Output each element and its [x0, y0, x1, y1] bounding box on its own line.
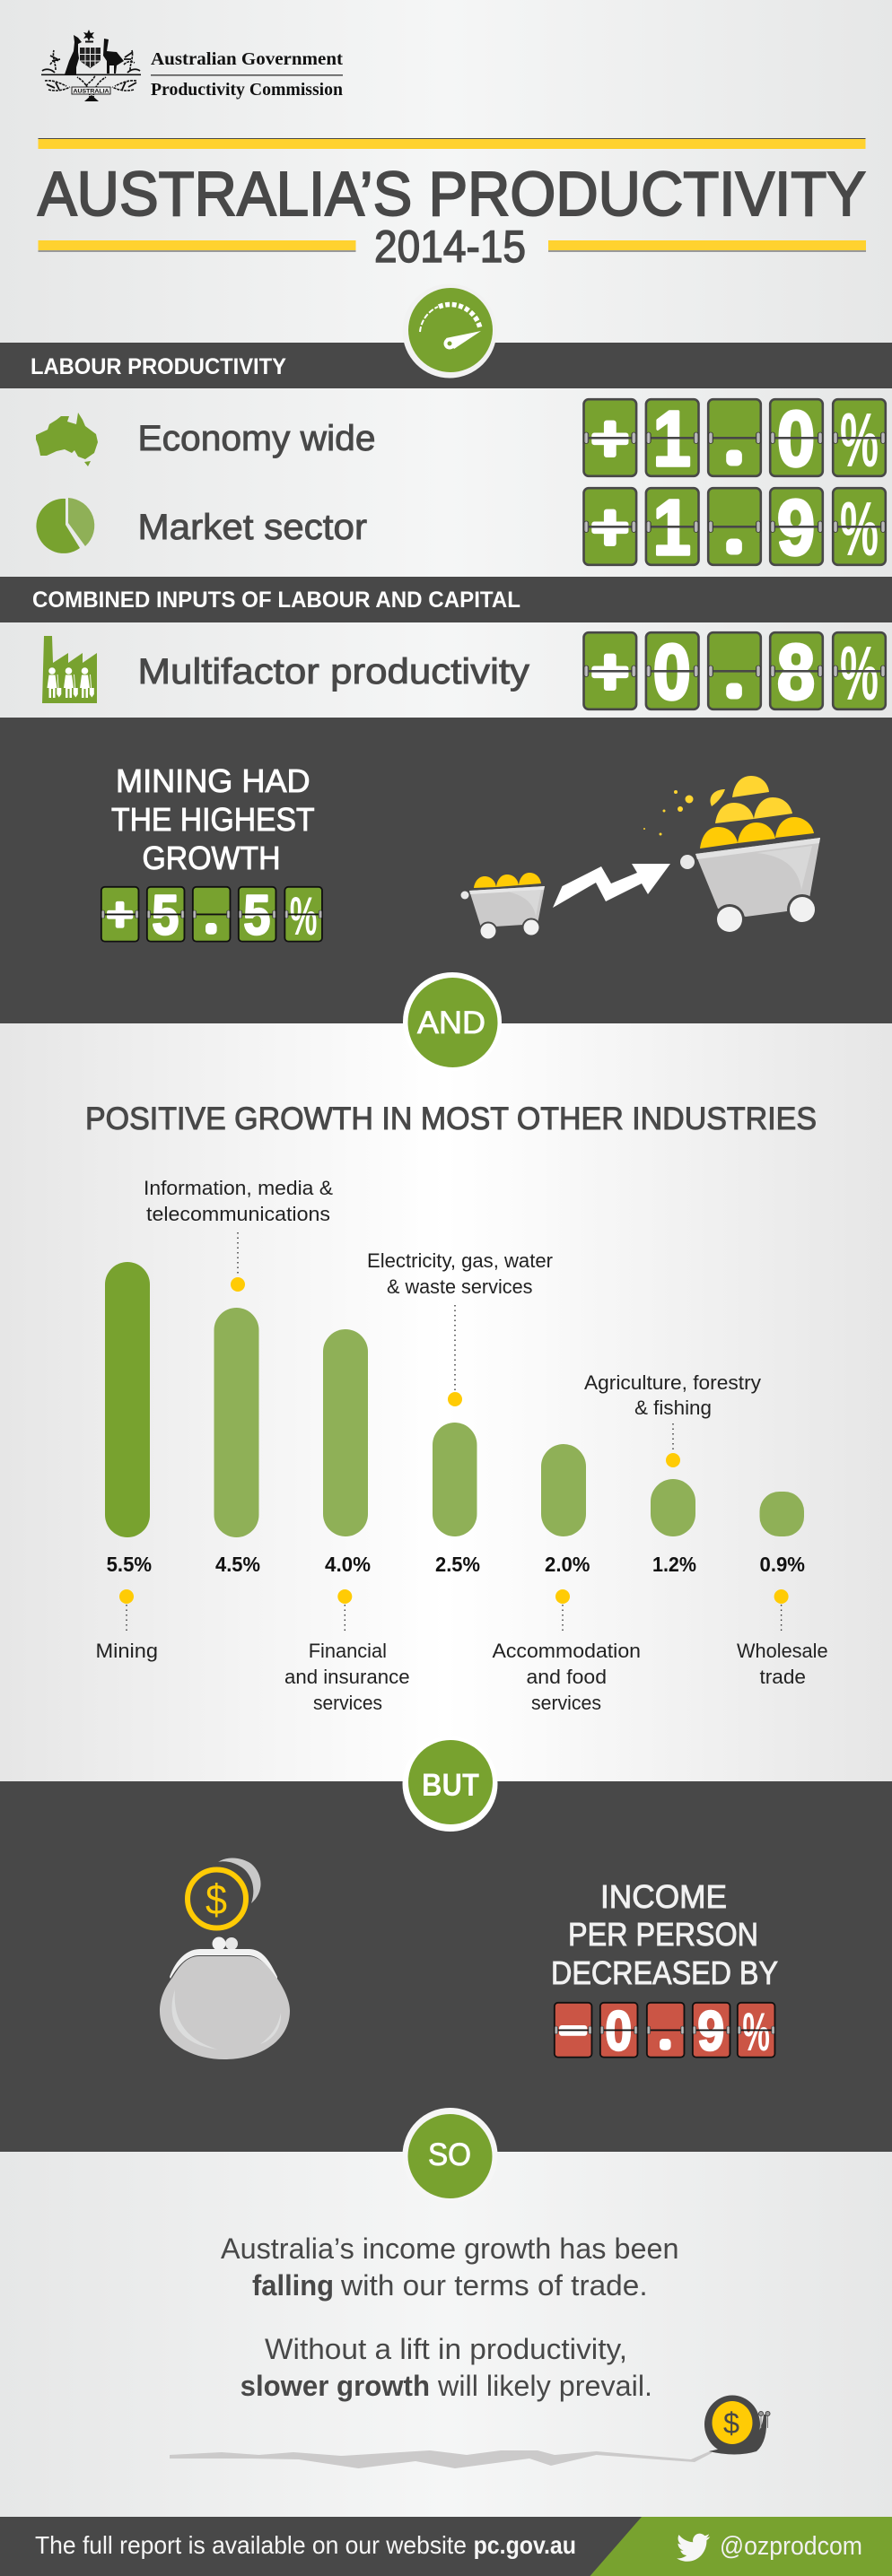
badge: AND: AND [417, 1005, 485, 1040]
row background [0, 388, 892, 577]
logo: Australian Government crest [41, 30, 141, 101]
bar values: 1.2% [652, 1553, 696, 1576]
text: slower growth will likely prevail: slower growth [240, 2370, 430, 2402]
callout: agriculture, forestry and fishing: & fishing [634, 1397, 712, 1419]
footer text: full report: pc.gov.au [474, 2531, 576, 2559]
section bands: labour productivity [0, 343, 892, 388]
callout: agriculture, forestry and fishing: Agriculture, forestry [584, 1371, 761, 1394]
value: +0.8% [583, 629, 886, 717]
badge: SO: SO [428, 2137, 471, 2172]
heading: income per person decreased by: DECREASED BY [551, 1954, 778, 1991]
heading: mining had the highest growth: THE HIGHEST [111, 801, 315, 838]
icon: large mine cart full of gold [643, 776, 820, 935]
text: income growth falling: falling [252, 2269, 334, 2302]
value: +0.8%: 8 [777, 629, 815, 716]
callout: electricity, gas, water and waste services [367, 1249, 553, 1406]
value: -0.9%: 9 [697, 2000, 724, 2062]
panel: mining [0, 718, 892, 1023]
label: market sector: Market sector [138, 508, 367, 547]
row: economy wide [36, 396, 886, 483]
callout: wholesale trade: trade [759, 1666, 806, 1688]
text: slower growth will likely prevail: will likely prevail. [437, 2370, 652, 2402]
callout: mining: Mining [95, 1640, 158, 1662]
value: +1.9%: 1 [653, 484, 691, 571]
value: +5.5%: + [107, 890, 133, 940]
section band: combined inputs [0, 577, 892, 622]
callout: financial and insurance services: and insurance [284, 1666, 410, 1688]
label: economy wide: Economy wide [138, 419, 375, 458]
icon: snail with dollar shell [704, 2395, 770, 2454]
value: +0.8%: 0 [653, 629, 691, 716]
logo: Australian Government crest: AUSTRALIA [74, 88, 109, 95]
callout: agriculture, forestry and fishing [584, 1371, 761, 1467]
callout: electricity, gas, water and waste services: Electricity, gas, water [367, 1249, 553, 1272]
bar values [107, 1553, 805, 1576]
callout: financial and insurance services: Financial [309, 1640, 387, 1662]
text: slower growth will likely prevail [240, 2333, 652, 2402]
row: multifactor productivity [42, 629, 886, 717]
callout: financial and insurance services [284, 1589, 410, 1714]
value: -0.9%: 0 [605, 2000, 632, 2062]
panel: income [0, 1781, 892, 2152]
text: slower growth will likely prevail: Without a lift in productivity, [265, 2333, 627, 2365]
bar values: 5.5% [107, 1553, 152, 1576]
footer bar [0, 2517, 892, 2576]
value: -0.9% [555, 2000, 774, 2062]
value: +5.5%: 5 [243, 884, 270, 946]
page background: header [0, 0, 892, 343]
section background: conclusion [0, 2152, 892, 2517]
icon: coin and purse: $ [206, 1875, 227, 1923]
section background: industries [0, 1023, 892, 1781]
bar values: 4.0% [325, 1553, 371, 1576]
value: +1.0%: 1 [653, 396, 691, 483]
footer text: full report: The full report is available on our website [35, 2531, 467, 2559]
row: market sector [36, 484, 886, 572]
heading: labour productivity: LABOUR PRODUCTIVITY [31, 354, 286, 379]
value: -0.9%: . [661, 2023, 669, 2052]
callout: accommodation and food services: Accommodation [492, 1640, 641, 1662]
value: +1.9%: + [591, 492, 628, 561]
value: +1.0%: + [591, 404, 628, 474]
value: -0.9%: % [742, 2001, 770, 2062]
bar values: 0.9% [759, 1553, 805, 1576]
logo text: Australian Government Productivity Commission: Productivity Commission [151, 81, 343, 100]
icon: snail with dollar shell: $ [723, 2406, 739, 2440]
icon: coin and purse [160, 1858, 290, 2059]
arrow: jagged upward arrow [553, 864, 670, 908]
value: +1.9%: 9 [777, 484, 815, 571]
icon: pie chart [36, 498, 94, 553]
badge: BUT: BUT [422, 1768, 479, 1803]
value: -0.9%: − [560, 2006, 586, 2056]
icon: factory with workers [42, 636, 97, 703]
value: +1.0% [583, 396, 886, 483]
badge: AND [403, 972, 502, 1071]
callout: financial and insurance services: services [313, 1692, 382, 1714]
heading: mining had the highest growth [111, 762, 315, 876]
value: +1.0%: . [729, 429, 739, 468]
callout: accommodation and food services: and food [526, 1666, 607, 1688]
value: +5.5%: % [290, 885, 317, 946]
value: +5.5% [101, 884, 322, 946]
callout: accommodation and food services: services [531, 1692, 601, 1714]
row background [0, 622, 892, 718]
heading: mining had the highest growth: GROWTH [142, 840, 280, 876]
callout: information, media and telecommunications: Information, media & [144, 1177, 333, 1199]
value: +1.9%: . [729, 518, 739, 558]
icon: small mine cart [461, 873, 545, 940]
subtitle year: 2014-15 [374, 222, 526, 272]
callout: wholesale trade [737, 1589, 828, 1688]
text: income growth falling: Australia’s income growth has been [221, 2232, 678, 2265]
callout: electricity, gas, water and waste services: & waste services [387, 1275, 533, 1298]
badge: SO [402, 2108, 497, 2203]
heading: mining had the highest growth: MINING HAD [116, 762, 310, 799]
value: +0.8%: . [729, 662, 739, 701]
bar values: 2.0% [545, 1553, 590, 1576]
value: +0.8%: + [591, 637, 628, 707]
value: +1.0%: 0 [777, 396, 815, 483]
heading: income per person decreased by: PER PERSON [568, 1916, 758, 1953]
value: +1.9% [583, 484, 886, 572]
logo text: Australian Government Productivity Commission: Australian Government [151, 49, 343, 69]
text: income growth falling [221, 2232, 678, 2302]
callout: information, media and telecommunications: telecommunications [146, 1203, 330, 1225]
logo text: Australian Government Productivity Commission [151, 49, 343, 100]
badge: BUT [402, 1736, 497, 1832]
bar chart: industry growth [105, 1262, 805, 1576]
footer text: twitter handle: @ozprodcom [720, 2532, 862, 2561]
heading: positive growth: POSITIVE GROWTH IN MOST OTHER INDUSTRIES [85, 1101, 817, 1136]
bar values: 2.5% [435, 1553, 480, 1576]
heading: income per person decreased by: INCOME [600, 1878, 727, 1915]
callout: information, media and telecommunications [144, 1177, 333, 1292]
title bars [38, 138, 866, 252]
bar values: 4.5% [215, 1553, 260, 1576]
heading: income per person decreased by [551, 1878, 778, 1991]
value: +5.5%: . [207, 908, 214, 936]
callout: mining [95, 1589, 158, 1662]
callout: accommodation and food services [492, 1589, 641, 1714]
icon: snail trail [170, 2450, 712, 2468]
text: income growth falling: with our terms of trade. [340, 2269, 648, 2302]
icon: map of Australia [36, 413, 98, 466]
callout: wholesale trade: Wholesale [737, 1640, 828, 1662]
value: +5.5%: 5 [152, 884, 179, 946]
heading: combined inputs: COMBINED INPUTS OF LABOUR AND CAPITAL [32, 587, 520, 613]
icon: speedometer badge [402, 283, 497, 379]
icon: twitter bird [677, 2534, 710, 2562]
label: multifactor productivity: Multifactor productivity [138, 652, 529, 692]
